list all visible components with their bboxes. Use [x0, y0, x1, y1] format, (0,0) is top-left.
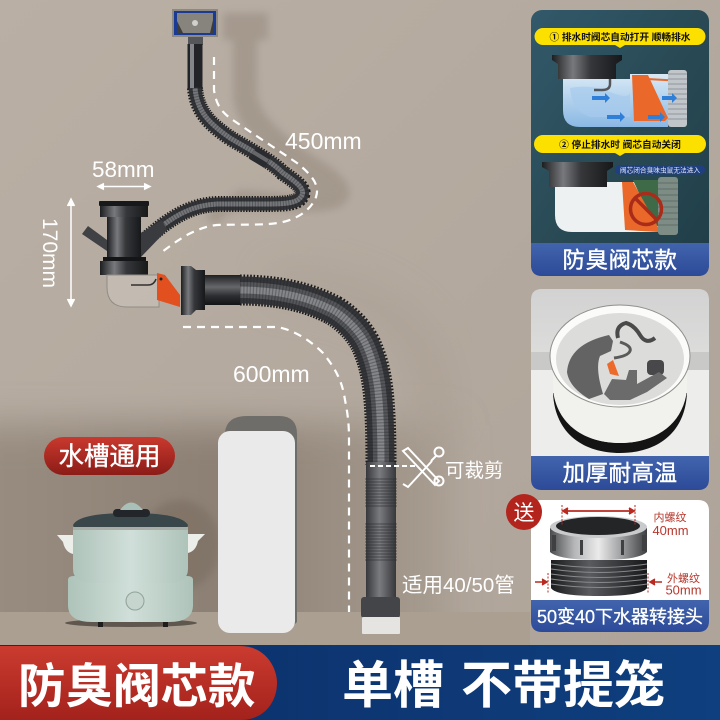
dashed line: 450mm — [162, 57, 317, 252]
dimensions: 40mm thread: 内螺纹 — [654, 510, 686, 524]
banner title: anti-odor model: 防臭阀芯款 — [18, 661, 256, 714]
lower tube and end cap — [361, 462, 400, 634]
panel label — [531, 600, 709, 632]
dashed line: 600mm — [183, 327, 349, 612]
label: can be cut: 可裁剪 — [445, 460, 504, 482]
hose: 450mm — [145, 44, 303, 240]
panel: heat resistant — [531, 289, 709, 490]
label: fits 40/50 pipe: 适用40/50管 — [402, 574, 515, 597]
dimensions: 50mm thread: 50mm — [665, 582, 702, 598]
dimensions: 50mm thread — [535, 571, 702, 598]
callout: step 2 — [534, 135, 706, 156]
icon: scissors with cut line — [370, 448, 444, 487]
banner title: single sink no basket: 不带提笼 — [461, 657, 665, 714]
upper hose assembly — [145, 9, 303, 240]
arrow: 170mm height — [68, 199, 74, 306]
cabinet niche and floor — [0, 13, 530, 675]
lower hose: 600mm — [205, 275, 381, 465]
label: 600mm: 600mm — [233, 361, 310, 387]
panel label — [531, 456, 709, 490]
callout: step 2: ② 停止排水时 阀芯自动关闭 — [559, 138, 681, 151]
orange valve — [157, 273, 180, 307]
callout: step 1: ① 排水时阀芯自动打开 顺畅排水 — [549, 30, 691, 44]
badge: free gift — [506, 494, 542, 530]
banner title: single sink no basket — [342, 657, 665, 714]
panel label: 加厚耐高温 — [562, 461, 678, 486]
badge: free gift: 送 — [514, 502, 534, 525]
panel label — [531, 243, 709, 276]
badge: sink universal — [44, 437, 175, 475]
label: 58mm: 58mm — [92, 157, 155, 182]
drain fitting — [82, 201, 205, 315]
dimensions: 40mm thread — [562, 505, 689, 538]
badge: sink universal: 水槽通用 — [58, 443, 161, 471]
pot on induction cooker — [57, 500, 220, 627]
photo: pot with parts in water — [531, 305, 709, 457]
diagram: valve closed: 阀芯闭合臭味虫鼠无法进入 — [620, 166, 700, 174]
threaded nut — [181, 266, 205, 315]
arrow: 58mm width — [98, 184, 150, 190]
banner title: single sink no basket: 单槽 — [342, 657, 444, 714]
panel label: 50变40下水器转接头 — [537, 607, 703, 627]
panel label: 防臭阀芯款 — [562, 248, 678, 273]
diagram: valve closed — [542, 162, 705, 235]
callout: step 1 — [535, 28, 705, 48]
banner: red tab — [0, 646, 277, 720]
label: 170mm: 170mm — [38, 218, 61, 288]
photo: adapter — [550, 516, 647, 596]
dimensions: 50mm thread: 外螺纹 — [667, 571, 700, 585]
dimensions: 40mm thread: 40mm — [652, 523, 689, 538]
diagram: valve open — [552, 55, 687, 127]
white water purifier — [218, 416, 297, 633]
panel: adapter gift — [531, 500, 709, 632]
label: 450mm: 450mm — [285, 128, 362, 154]
wall bracket — [172, 9, 218, 45]
clear elbow — [107, 275, 159, 307]
bottom banner — [0, 645, 720, 720]
panel: anti-odor valve — [531, 10, 709, 276]
